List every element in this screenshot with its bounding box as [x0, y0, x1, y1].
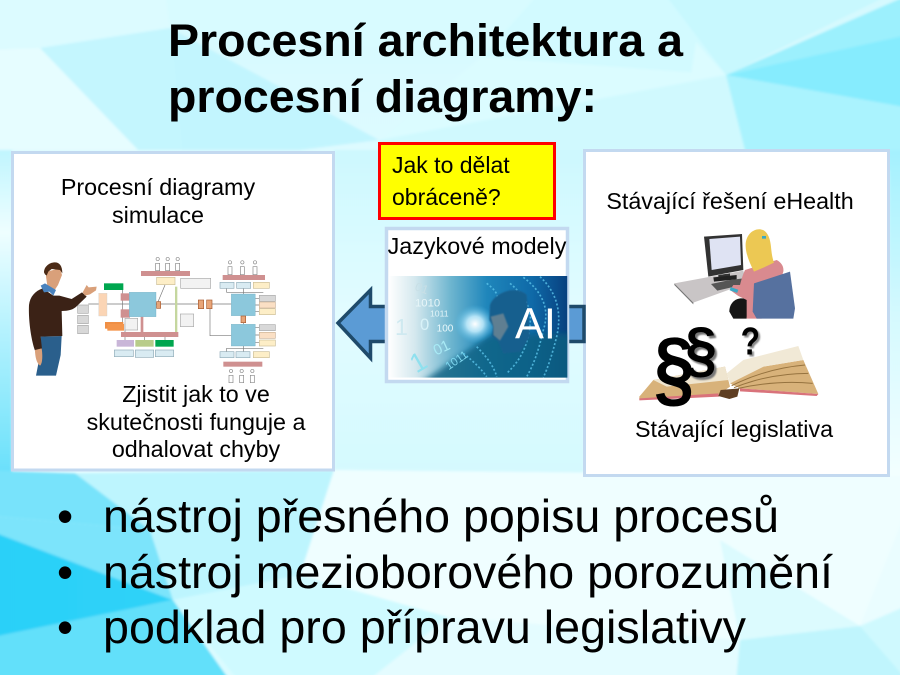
icon: presenting man: [29, 262, 97, 376]
image: AI head with binary tunnel: 1011: [430, 309, 449, 319]
bullet list: •: [57, 601, 73, 653]
panel caption: find out how it really works: Zjistit jak to ve: [122, 381, 270, 407]
bullet list: •: [57, 490, 73, 542]
image: AI head with binary tunnel: 100: [437, 324, 454, 335]
title: [168, 15, 684, 122]
panel caption: find out how it really works: odhalovat chyby: [112, 436, 281, 462]
icon: woman at a computer: [674, 229, 795, 319]
bullet list: podklad pro přípravu legislativy: [103, 601, 746, 653]
panel heading: current eHealth solution: Stávající řešení eHealth: [606, 188, 854, 214]
callout: how to do it in reverse: [380, 144, 554, 218]
callout: how to do it in reverse: Jak to dělat: [392, 152, 510, 178]
image: AI head with binary tunnel: 01: [413, 279, 431, 297]
arrow: from right panel to left panel: [338, 290, 584, 358]
image: AI head with binary tunnel: 01: [431, 337, 453, 359]
icon: open law book with paragraph signs: ?: [743, 321, 762, 365]
title: Procesní architektura a: [168, 15, 684, 66]
bullet list: nástroj mezioborového porozumění: [103, 546, 833, 598]
icon: open law book with paragraph signs: ?: [741, 319, 760, 363]
icon: open law book with paragraph signs: §: [685, 315, 717, 384]
panel heading: process diagrams and simulation: Procesní diagramy: [61, 174, 255, 200]
icon: open law book with paragraph signs: §: [687, 318, 719, 387]
image: AI head with binary tunnel: 0: [420, 315, 429, 334]
bullet list: [57, 490, 833, 653]
icon: open law book with paragraph signs: [639, 315, 818, 416]
image: AI head with binary tunnel: 1: [404, 345, 432, 379]
image: AI head with binary tunnel: 1010: [415, 298, 440, 310]
icon: open law book with paragraph signs: §: [654, 321, 695, 416]
panel heading: process diagrams and simulation: [61, 174, 255, 228]
panel heading: language models: Jazykové modely: [388, 233, 567, 259]
panel heading: process diagrams and simulation: simulace: [112, 202, 204, 228]
title: procesní diagramy:: [168, 71, 597, 122]
callout: how to do it in reverse: obráceně?: [392, 184, 501, 210]
image: AI head with binary tunnel: AI: [515, 300, 556, 348]
panel: language models: [386, 228, 573, 383]
panel caption: current legislation: Stávající legislativa: [635, 416, 833, 442]
bullet list: nástroj přesného popisu procesů: [103, 490, 779, 542]
image: AI head with binary tunnel: [394, 276, 568, 378]
panel caption: find out how it really works: [87, 381, 305, 462]
image: AI head with binary tunnel: 1: [395, 314, 408, 340]
panel: process diagrams: [12, 152, 334, 470]
panel: existing solutions: [584, 150, 888, 476]
bullet list: •: [57, 546, 73, 598]
panel caption: find out how it really works: skutečnosti funguje a: [87, 409, 305, 435]
image: AI head with binary tunnel: 1011: [444, 349, 470, 373]
process diagram thumbnail: [78, 257, 275, 383]
